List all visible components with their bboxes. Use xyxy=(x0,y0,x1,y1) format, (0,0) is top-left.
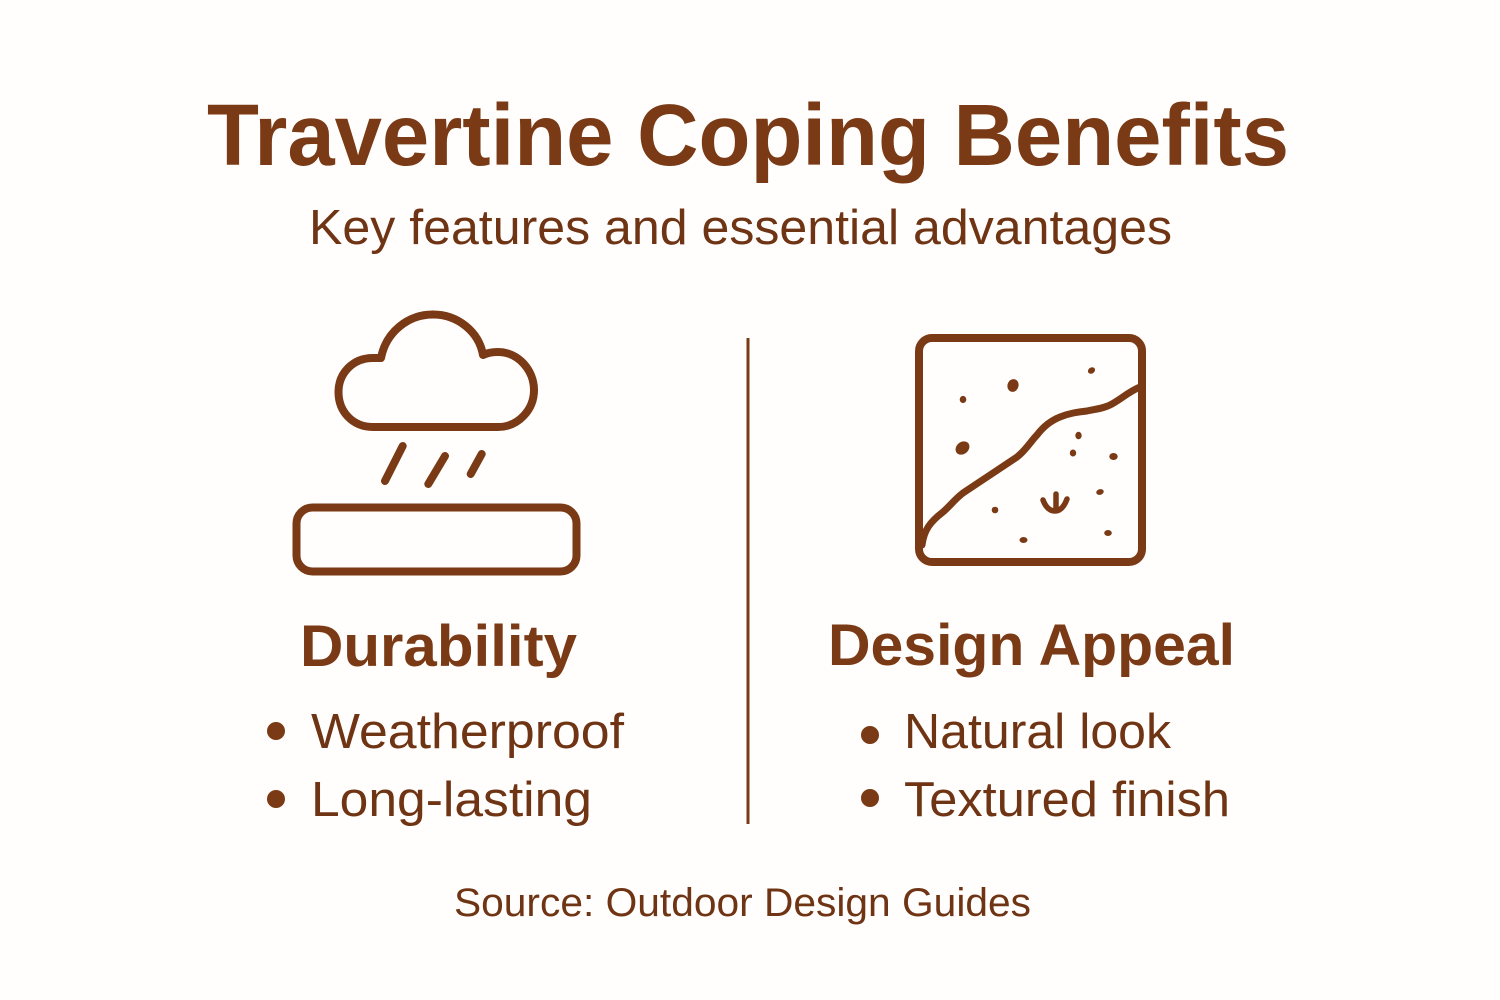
icon: textured stone tile xyxy=(919,338,1142,562)
list: design appeal benefits xyxy=(861,705,1230,827)
list: design appeal benefits: Textured finish xyxy=(904,773,1230,827)
source note: Source: Outdoor Design Guides xyxy=(454,881,1031,925)
list: durability benefits: Long-lasting xyxy=(311,773,592,827)
icon: rain cloud over stone slab xyxy=(296,314,576,572)
title: Travertine Coping Benefits xyxy=(207,87,1289,184)
heading: design appeal: Design Appeal xyxy=(828,613,1235,678)
list: durability benefits: Weatherproof xyxy=(311,705,624,759)
panel: durability xyxy=(267,314,624,827)
list: durability benefits xyxy=(267,705,624,827)
panel: design appeal xyxy=(828,338,1235,827)
heading: durability: Durability xyxy=(300,614,577,679)
list: design appeal benefits: Natural look xyxy=(904,705,1172,759)
subtitle: Key features and essential advantages xyxy=(309,201,1172,255)
